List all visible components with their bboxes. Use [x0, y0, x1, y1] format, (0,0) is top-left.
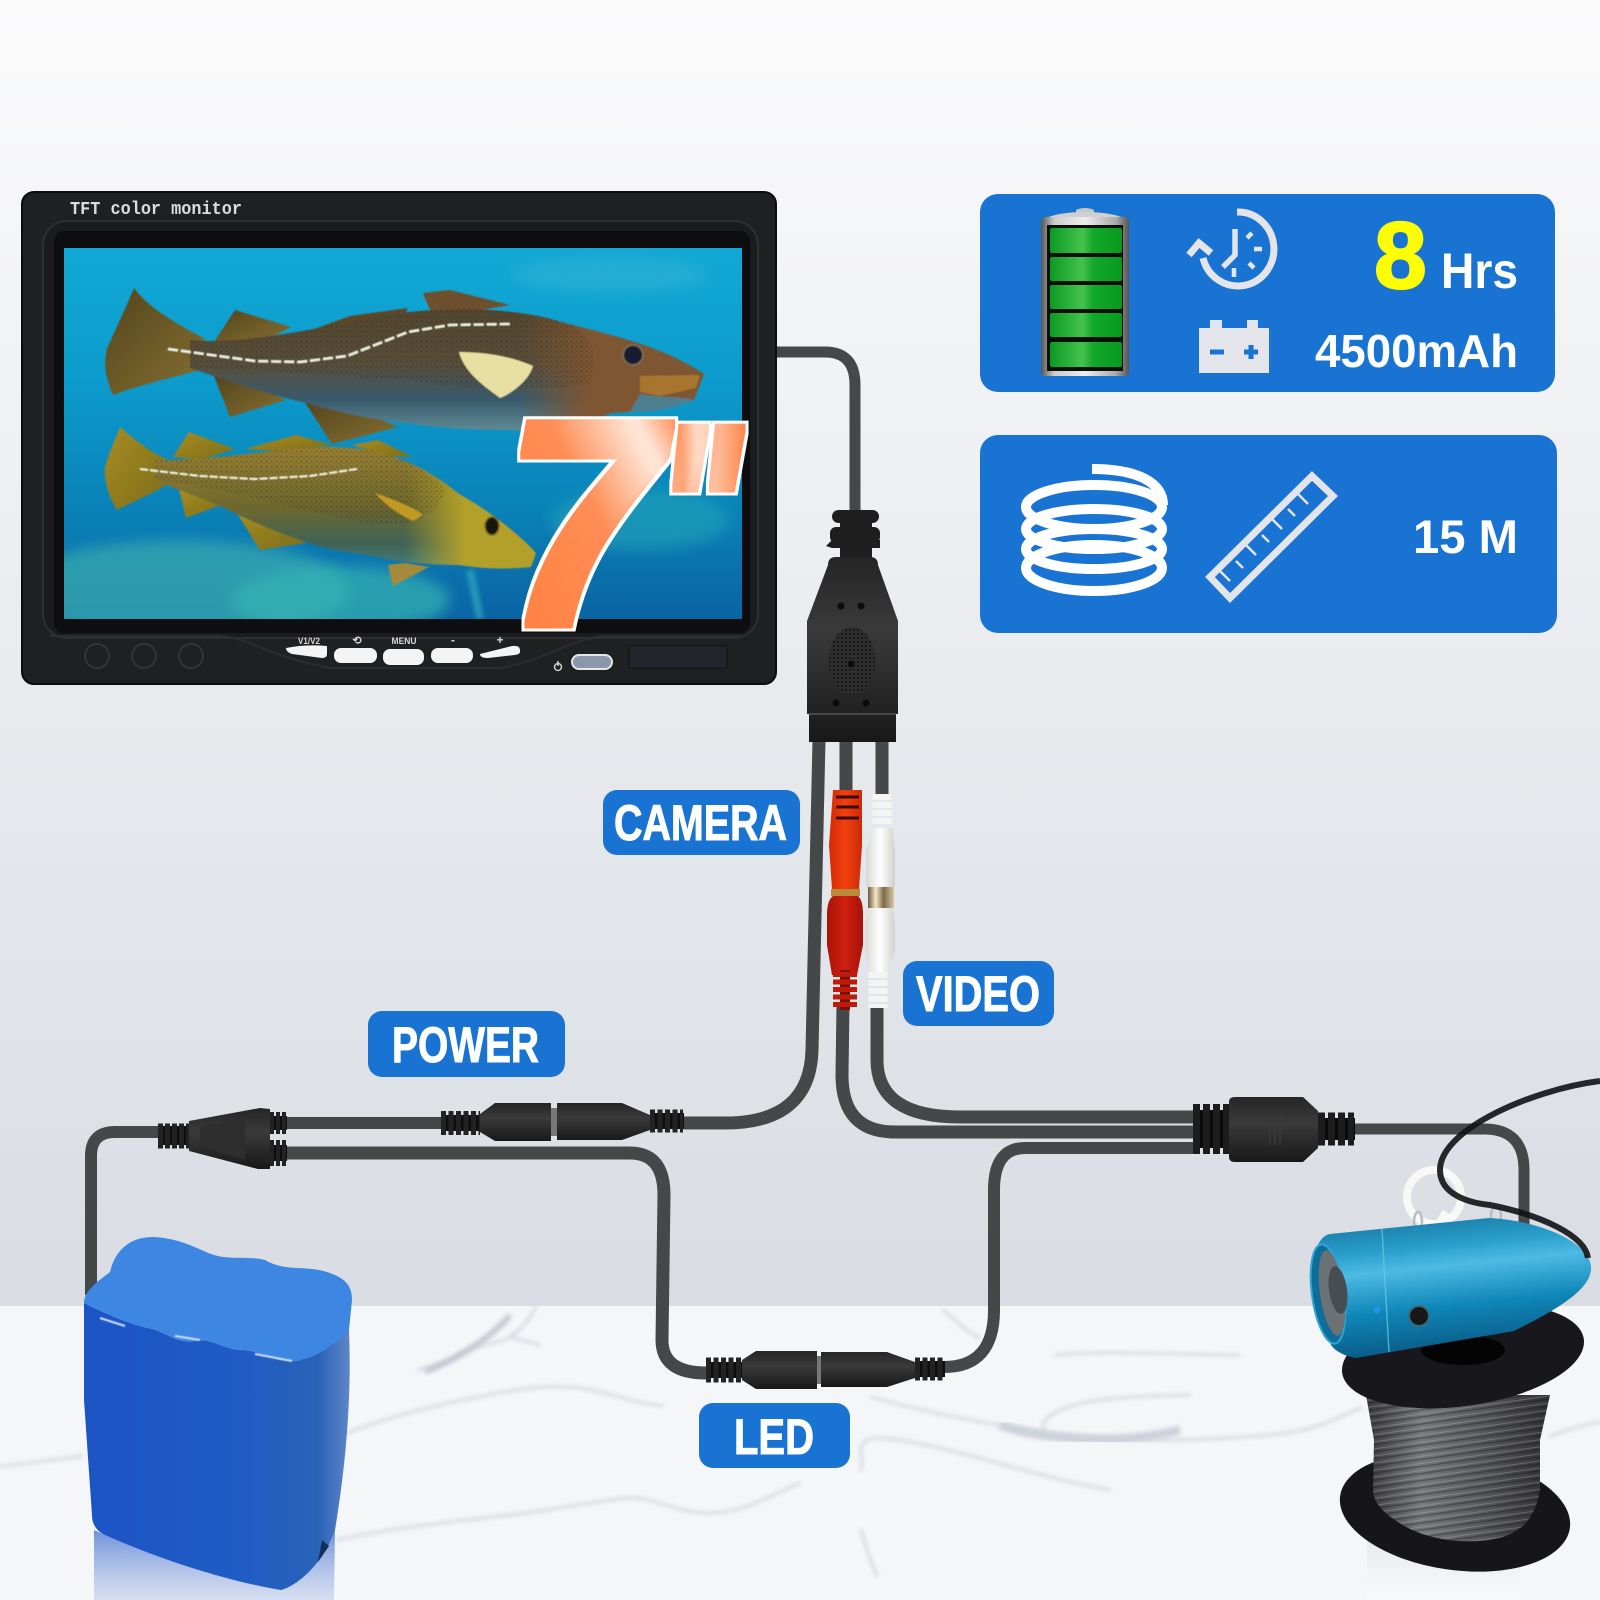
white female plug — [866, 828, 895, 887]
size label 7 inch: " — [657, 373, 743, 651]
camera front ring — [1305, 1242, 1351, 1346]
cable length value: 15 M — [1413, 510, 1518, 563]
control buttons — [286, 645, 520, 665]
camera — [1305, 1170, 1591, 1358]
button labels — [298, 633, 504, 647]
spool reflection — [1367, 1540, 1520, 1600]
power inline connector — [441, 1103, 684, 1141]
red male plug — [827, 896, 863, 975]
strain relief — [826, 510, 880, 560]
label: camera: CAMERA — [614, 795, 787, 851]
cable: camera trunk — [1352, 1129, 1524, 1225]
cable: monitor to splitter — [776, 352, 855, 520]
battery top — [84, 1237, 352, 1361]
runtime value: Hrs — [1441, 243, 1518, 299]
battery reflection — [94, 1530, 335, 1600]
bezel inner frame — [43, 221, 758, 638]
camera lens — [1314, 1249, 1350, 1337]
cable: power to splitter — [287, 1117, 445, 1129]
red female plug — [829, 790, 862, 889]
button labels: - — [451, 633, 455, 647]
monitor brand text: TFT color monitor — [70, 200, 242, 220]
logo badge — [572, 655, 612, 669]
panel: cable length — [980, 435, 1557, 633]
body seam — [1382, 1229, 1389, 1352]
runtime value: 8 — [1374, 203, 1427, 309]
button labels: ⟲ — [352, 635, 362, 647]
panel: battery specs — [980, 194, 1555, 392]
icon: ruler — [1210, 476, 1333, 598]
label: LED: LED — [734, 1409, 814, 1465]
infrared window — [629, 646, 727, 668]
battery pack — [84, 1237, 352, 1600]
white female ribs — [872, 794, 892, 826]
cable: LED feed — [287, 1153, 706, 1373]
screen — [64, 248, 742, 619]
main splitter connector — [807, 510, 898, 742]
spool top flange — [1335, 1290, 1591, 1422]
camera socket — [1409, 1306, 1429, 1326]
power icon — [554, 661, 562, 670]
spool hole — [1421, 1335, 1505, 1365]
power Y splitter — [158, 1108, 287, 1169]
white RCA connectors — [865, 794, 895, 1008]
icon: car battery — [1199, 320, 1269, 373]
capacity value: 4500mAh — [1315, 325, 1518, 377]
red plug ribs — [840, 970, 850, 1010]
button labels: + — [496, 633, 504, 647]
label: power — [368, 1011, 565, 1077]
cable spool — [1332, 1290, 1591, 1600]
label: LED — [699, 1403, 850, 1468]
camera trunk connector — [1193, 1097, 1355, 1162]
monitor — [10, 192, 776, 688]
fish: upper cod — [105, 288, 704, 444]
size label 7 inch: 7 — [504, 360, 676, 688]
label: video: VIDEO — [916, 966, 1040, 1022]
speaker grille — [829, 627, 875, 695]
spool wire — [1366, 1395, 1550, 1541]
cable: camera lead from splitter to power junction — [684, 740, 819, 1123]
cable: battery lead — [91, 1132, 160, 1295]
white hanging ring — [1407, 1170, 1461, 1232]
label: power: POWER — [392, 1017, 539, 1073]
battery top edge highlights — [100, 1318, 292, 1361]
icon: clock with arrow — [1189, 212, 1274, 286]
monitor bezel — [22, 192, 776, 684]
marble floor — [0, 1306, 1600, 1600]
white plug ribs — [868, 972, 888, 1008]
button labels: MENU — [392, 636, 416, 646]
camera indicator dot — [1374, 1306, 1380, 1314]
splitter body — [807, 557, 898, 742]
thin camera wire — [1440, 1081, 1600, 1258]
lower bezel contour — [50, 636, 745, 668]
gold barrel — [868, 887, 894, 908]
icon: cable coil — [1026, 469, 1163, 591]
red RCA connectors — [827, 790, 863, 1010]
LED inline connector — [706, 1351, 945, 1389]
cable: white lead — [877, 740, 1195, 1117]
side buttons — [85, 644, 203, 668]
cable: red lead — [842, 740, 1195, 1132]
size label 7 inch — [504, 360, 743, 688]
camera hooks — [1414, 1206, 1501, 1232]
fish: lower cod — [105, 427, 536, 586]
battery base corner shadow — [318, 1540, 329, 1562]
body holes — [832, 602, 870, 706]
battery front — [84, 1303, 350, 1590]
button labels: V1/V2 — [298, 636, 320, 646]
cable: LED return — [944, 1148, 1195, 1367]
white male plug — [865, 908, 895, 972]
spool bottom flange — [1332, 1438, 1578, 1586]
bezel recess — [54, 231, 750, 633]
runtime value — [1374, 203, 1518, 309]
icon: green battery — [1041, 208, 1129, 376]
camera body — [1313, 1218, 1591, 1358]
